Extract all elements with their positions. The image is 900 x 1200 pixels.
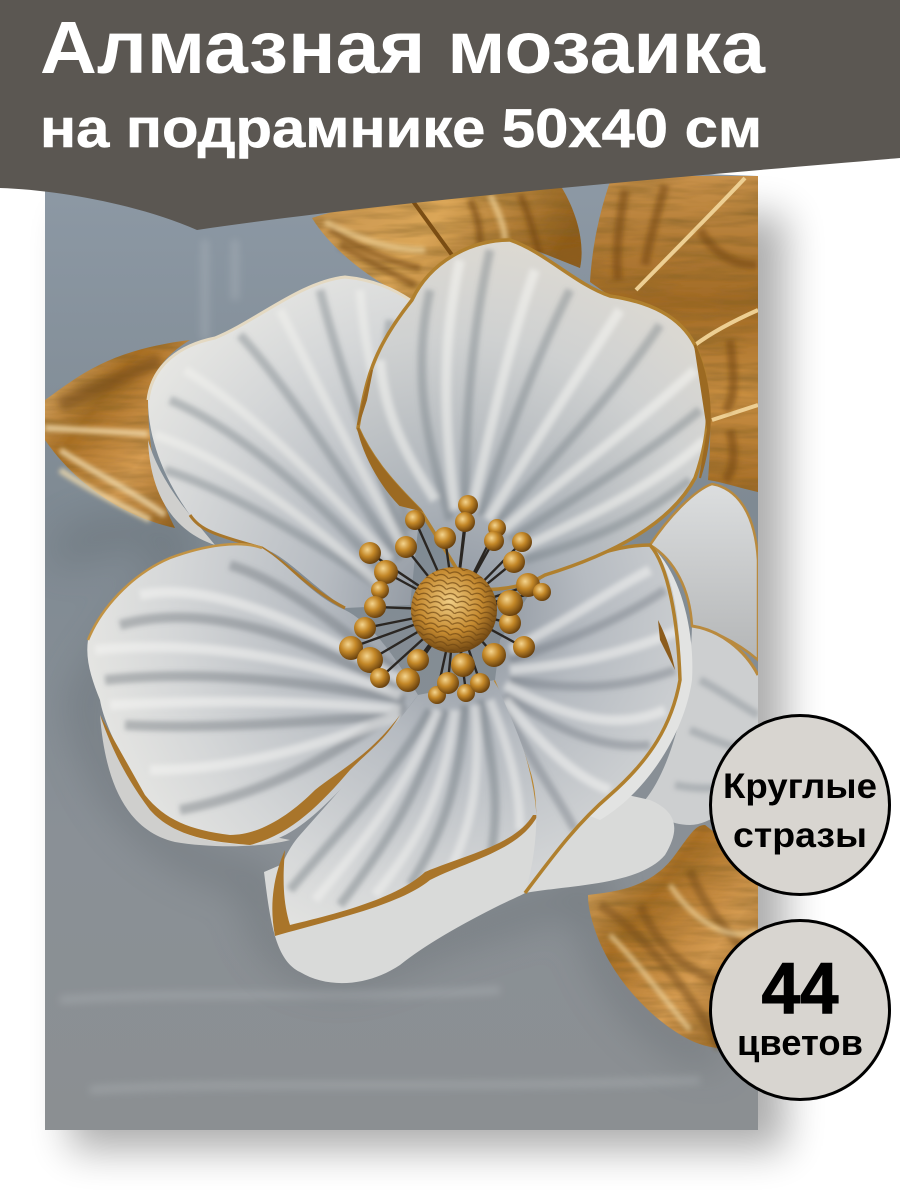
- stamen beads: [339, 495, 551, 704]
- petal: bottom: [272, 680, 538, 936]
- badge: 44 colours: [710, 920, 890, 1100]
- title: [40, 6, 766, 159]
- petal: lower right: [495, 545, 680, 893]
- title line 1: Алмазная мозаика: [40, 6, 766, 89]
- gold rim: top centre: [358, 240, 708, 590]
- leaf: bottom right gold: [588, 825, 758, 1048]
- canvas background: [45, 170, 758, 1130]
- leaf: top right gold: [590, 176, 758, 492]
- canvas with flower artwork: [45, 170, 758, 1130]
- flower cast shadow: [60, 530, 720, 1055]
- petal: top centre: [358, 240, 710, 590]
- badge: round rhinestones: Круглые: [723, 767, 877, 806]
- header banner: [0, 0, 900, 230]
- gold rim: lower right: [525, 545, 680, 893]
- petal: lower left: [87, 544, 418, 845]
- title line 2: на подрамнике 50х40 см: [40, 97, 762, 159]
- petal: upper left: [148, 277, 420, 608]
- petals: back white layers: [100, 440, 758, 983]
- gold rim: bottom: [272, 815, 538, 936]
- leaf: left gold: [45, 340, 190, 528]
- leaf: top gold: [312, 185, 582, 300]
- gold rim: lower left: [100, 715, 400, 845]
- badge: 44 colours: 44: [762, 949, 838, 1029]
- flower centre: stamens and gold core: [339, 495, 551, 704]
- gold core: [411, 567, 497, 653]
- canvas shadow: [70, 215, 785, 1150]
- badge: 44 colours: цветов: [737, 1022, 863, 1063]
- badge: round rhinestones: стразы: [733, 816, 867, 855]
- badge: round rhinestones: [710, 716, 890, 894]
